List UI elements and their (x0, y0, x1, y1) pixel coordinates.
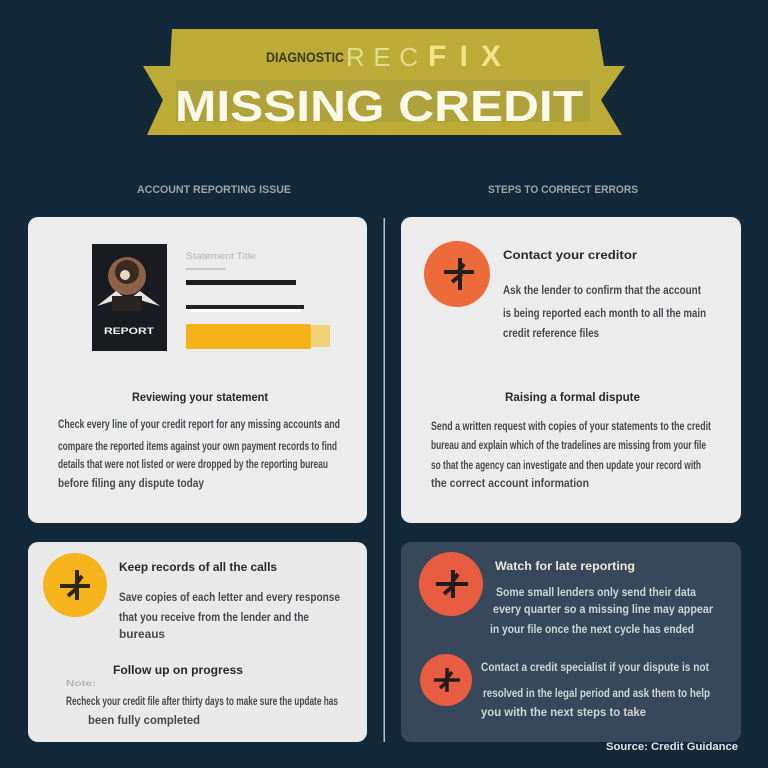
panel heading: Reviewing your statement (132, 390, 268, 404)
panel: yellow tip (28, 542, 367, 742)
icon: red badge two (420, 654, 472, 706)
icon: orange badge (424, 241, 490, 307)
warning text: Some small lenders only send their data (496, 587, 697, 599)
banner subtitle: REC (346, 42, 418, 72)
warning text: in your file once the next cycle has ended (490, 624, 694, 636)
banner subtitle (266, 40, 501, 73)
step text: is being reported each month to all the main (503, 308, 706, 320)
panel body text: Check every line of your credit report for any missing accounts and (58, 419, 340, 431)
tip note: Recheck your credit file after thirty days to make sure the update has (66, 696, 338, 708)
title banner (143, 29, 625, 135)
report detail lines (186, 251, 304, 312)
second heading: Raising a formal dispute (505, 390, 640, 404)
icon: yellow badge (43, 553, 107, 617)
step text: credit reference files (503, 328, 599, 340)
yellow status bar (186, 324, 330, 349)
second warning text: you with the next steps to take (481, 707, 646, 719)
second warning text: resolved in the legal period and ask them to help (483, 688, 710, 700)
step text: Ask the lender to confirm that the account (503, 285, 701, 297)
tip text: Save copies of each letter and every response (119, 592, 340, 604)
icon: red badge one (419, 552, 483, 616)
step text (503, 285, 706, 340)
icon: report cover (92, 244, 167, 351)
warning heading: Watch for late reporting (495, 559, 635, 573)
panel: dark warnings (401, 542, 741, 742)
source credit: Source: Credit Guidance (606, 741, 738, 753)
warning text: every quarter so a missing line may appear (493, 604, 713, 616)
right column label: STEPS TO CORRECT ERRORS (488, 184, 638, 196)
warning text (490, 587, 713, 636)
second text (431, 421, 711, 490)
panel: first fix (401, 217, 741, 523)
tip note (66, 679, 338, 727)
tip text: bureaus (119, 629, 165, 641)
center divider (384, 218, 385, 742)
banner subtitle: DIAGNOSTIC (266, 49, 344, 65)
banner headline: MISSING CREDIT (175, 82, 583, 131)
banner subtitle: FIX (428, 40, 501, 73)
panel body text: before filing any dispute today (58, 478, 205, 490)
panel body text: compare the reported items against your own payment records to find (58, 441, 337, 453)
panel body text (58, 419, 340, 490)
second warning text: Contact a credit specialist if your dispute is not (481, 662, 709, 674)
icon: report cover: REPORT (104, 326, 155, 336)
second text: the correct account information (431, 478, 589, 490)
tip text: that you receive from the lender and the (119, 612, 309, 624)
panel: credit report (28, 217, 367, 523)
panel body text: details that were not listed or were dropped by the reporting bureau (58, 459, 328, 471)
tip subheading: Follow up on progress (113, 663, 243, 677)
tip heading: Keep records of all the calls (119, 560, 277, 574)
step heading: Contact your creditor (503, 248, 637, 262)
left column label: ACCOUNT REPORTING ISSUE (137, 184, 291, 196)
tip text (119, 592, 340, 641)
second warning text (481, 662, 710, 719)
tip note: been fully completed (88, 715, 200, 727)
tip note: Note: (66, 679, 96, 688)
report detail lines: Statement Title (186, 251, 256, 261)
